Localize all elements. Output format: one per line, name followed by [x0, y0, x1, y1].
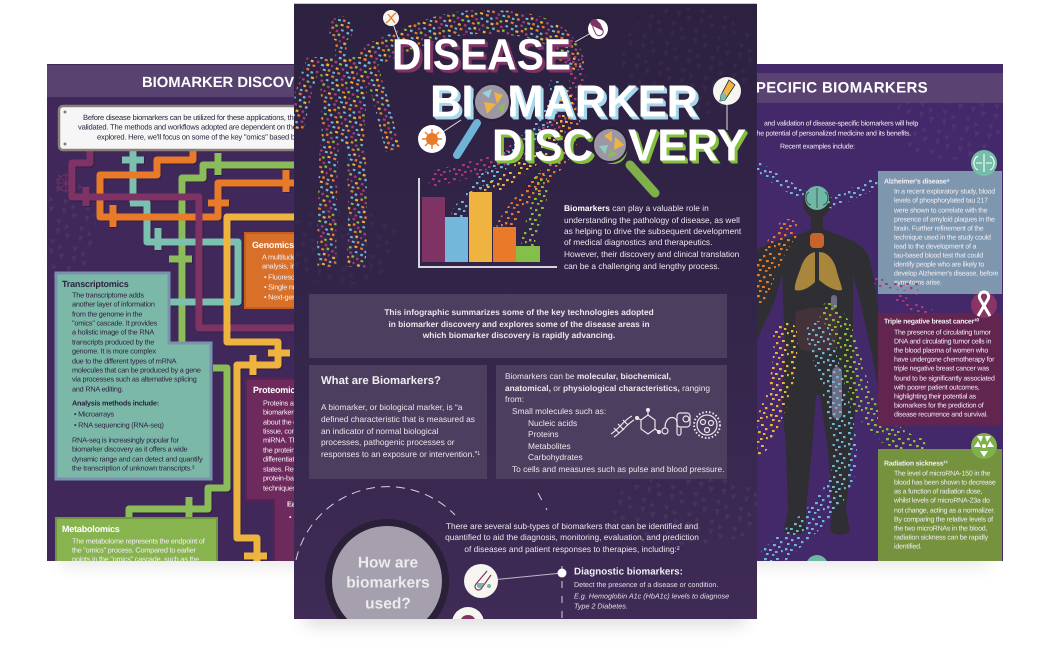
particle human figure — [296, 16, 393, 267]
panel: biomarker characteristics: Biomarkers can be molecular, biochemical, — [505, 371, 671, 381]
panel: transcriptomics: the transcription of unknown transcripts.³ — [72, 464, 195, 472]
diagnostic biomarkers text: Diagnostic biomarkers: — [574, 566, 683, 578]
panel: triple negative breast cancer: highlighting their potential as — [894, 392, 977, 400]
panel: metabolomics: the "omics" process. Compared to earlier — [72, 546, 197, 554]
summary box — [309, 294, 727, 358]
icon: virus callout — [418, 120, 461, 153]
human silhouette with organs — [757, 187, 887, 534]
panel: genomics: • Next-generation — [264, 292, 317, 302]
pipes network — [72, 150, 297, 565]
intro note: Before disease biomarkers can be utilized for these applications, they — [83, 113, 301, 122]
header band: DISEASE-SPECIFIC BIOMARKERS — [672, 80, 928, 96]
panel: Alzheimer's disease: levels of phosphorylated tau 217 — [894, 196, 988, 204]
bars — [422, 192, 540, 262]
summary box: This infographic summarizes some of the key technologies adopted — [384, 307, 654, 317]
panel: what are biomarkers — [309, 365, 487, 479]
panel: radiation sickness: blood has been shown to decrease — [894, 478, 996, 486]
panel: transcriptomics — [56, 273, 211, 479]
panel: proteomics: miRNA. The — [263, 436, 301, 444]
icon: brain on figure — [805, 186, 829, 210]
intro note — [59, 106, 323, 150]
panel: radiation sickness: whilst levels of microRNA-23a do — [893, 496, 990, 504]
icons: DNA, molecule, stethoscope, cell — [611, 408, 720, 438]
how are biomarkers used circle: How are — [358, 554, 419, 572]
panel: biomarker characteristics: Small molecules such as: — [512, 406, 606, 416]
intro paragraph: Biomarkers can play a valuable role in — [564, 203, 709, 213]
title line: DISCOVERY: VERY — [628, 120, 746, 170]
panel: transcriptomics: The transcriptome adds — [72, 290, 144, 300]
panel: proteomics: about the cell — [263, 418, 304, 426]
panel: metabolomics: points in the "omics" cascade, such as the — [72, 554, 199, 564]
panel: proteomics: states. Research — [263, 464, 314, 474]
panel: metabolomics: The metabolome represents the endpoint of — [72, 536, 206, 546]
summary box: in biomarker discovery and explores some of the disease areas in — [388, 319, 650, 329]
panel: transcriptomics: • Microarrays — [74, 410, 114, 418]
intro paragraph: as helping to drive the subsequent development — [564, 226, 742, 236]
icon: test tube callout — [713, 77, 741, 130]
panel: triple negative breast cancer: DNA and circulating tumor cells in — [894, 338, 992, 346]
header band — [757, 73, 1003, 103]
panel: triple negative breast cancer: with poorer patient outcomes, — [893, 384, 980, 392]
panel: triple negative breast cancer — [878, 313, 1002, 426]
header band — [47, 65, 294, 97]
panel: metabolomics: Metabolomics — [62, 524, 120, 534]
icon: brain badge — [971, 150, 997, 176]
icon: partial teal badge — [807, 555, 827, 561]
panel: proteomics: differentiating — [263, 454, 304, 464]
panel: proteomics: protein-based — [263, 474, 305, 482]
panel: proteomics: • — [289, 512, 292, 522]
overlapping particles — [878, 282, 918, 447]
how are biomarkers used circle: biomarkers — [346, 574, 430, 592]
intro paragraph: can be a challenging and lengthy process. — [564, 261, 720, 271]
subtypes intro — [445, 521, 699, 554]
panel: radiation sickness: identified. — [894, 542, 922, 550]
icon: ribbon badge — [971, 292, 997, 318]
summary box: which biomarker discovery is rapidly advancing. — [422, 330, 615, 340]
subtypes intro: of diseases and patient responses to therapies, including:² — [464, 544, 680, 554]
title line: DISCOVERY: DISC — [492, 120, 593, 170]
panel: what are biomarkers: processes, pathogenic processes or — [321, 437, 455, 447]
icon: pill node — [452, 607, 484, 639]
panel: proteomics: Ea — [287, 500, 297, 508]
panel: proteomics: biomarkers — [263, 408, 297, 416]
icon: magnifier over BIOMARKER — [457, 84, 510, 155]
panel: radiation sickness: the two microRNAs in the blood, — [894, 524, 987, 532]
panel: transcriptomics: biomarker discovery as it offers a wide — [72, 444, 188, 454]
panel: Alzheimer's disease: identify people who are likely to — [894, 260, 984, 268]
title line: DISCOVERY — [494, 129, 748, 164]
intro paragraph — [564, 203, 742, 271]
intro text: and validation of disease-specific biomarkers will help — [764, 120, 918, 128]
intestines — [795, 308, 839, 352]
diagnostic biomarkers text — [574, 566, 729, 610]
panel: biomarker characteristics: Metabolites — [528, 441, 571, 451]
panel: proteomics: the proteins — [263, 446, 299, 454]
trachea — [810, 233, 824, 248]
panel: radiation sickness — [878, 449, 1002, 562]
panel: genomics: • Single nucleotide — [264, 282, 320, 292]
panel: transcriptomics: Analysis methods include: — [72, 398, 159, 408]
panel: radiation sickness: not change, acting as a normalizer. — [894, 506, 995, 514]
bar chart — [419, 178, 557, 267]
diagnostic biomarkers text: Type 2 Diabetes. — [574, 602, 628, 610]
intro text: Recent examples include: — [780, 142, 855, 150]
diagnostic biomarkers text: Detect the presence of a disease or condition. — [574, 581, 718, 589]
header band: BIOMARKER DISCOVERY — [142, 75, 324, 91]
icon: test tube node — [464, 564, 498, 598]
intro paragraph: understanding the pathology of disease, as well — [564, 215, 740, 225]
panel: Alzheimer's disease: develop Alzheimer's disease, before — [894, 270, 998, 278]
particle streams — [757, 167, 932, 557]
panel: disease-specific biomarkers — [757, 64, 1003, 561]
panel: transcriptomics: another layer of information — [72, 300, 155, 308]
panel: genomics: A multitude — [262, 252, 296, 262]
panel: Alzheimer's disease: were shown to correlate with the — [893, 206, 988, 214]
panel: triple negative breast cancer: Triple negative breast cancer¹⁰ — [884, 318, 979, 326]
panel: metabolomics — [55, 517, 218, 561]
panel: transcriptomics: "omics" cascade. It provides — [72, 318, 158, 328]
panel: Alzheimer's disease: brain. Further refinement of the — [894, 224, 984, 232]
panel: Alzheimer's disease: Alzheimer's disease⁹ — [884, 178, 950, 186]
panel: genomics — [244, 232, 294, 309]
panel: triple negative breast cancer: found to be significantly associated — [894, 374, 995, 382]
dashed orbits — [296, 487, 562, 620]
title line: DISEASE: DISEASE — [392, 30, 571, 80]
icon: pill callout — [575, 19, 608, 42]
panel: radiation sickness: radiation sickness can be rapidly — [894, 534, 989, 542]
panel: radiation sickness: Radiation sickness¹¹ — [884, 460, 949, 468]
intro paragraph: However, their discovery and clinical translation — [564, 249, 740, 259]
panel: Alzheimer's disease: tau-based blood test that could — [894, 252, 983, 260]
panel: transcriptomics: Transcriptomics — [62, 279, 129, 289]
intro note: validated. The methods and workflows adopted are dependent on the type — [78, 122, 312, 132]
panel: Alzheimer's disease: In a recent exploratory study, blood — [894, 188, 995, 196]
diagnostic biomarkers text: E.g. Hemoglobin A1c (HbA1c) levels to diagnose — [574, 592, 729, 600]
panel: triple negative breast cancer: triple negative breast cancer was — [894, 364, 990, 372]
panel: biomarker discovery methods — [47, 64, 294, 561]
icon: faint molecule — [56, 173, 76, 193]
panel: transcriptomics: RNA-seq is increasingly popular for — [72, 436, 179, 444]
panel: biomarker characteristics: anatomical, or physiological characteristics, ranging — [505, 383, 710, 393]
panel: Alzheimer's disease: symptoms arise. — [894, 278, 942, 286]
panel: what are biomarkers: an indicator of normal biological — [321, 426, 438, 436]
panel: triple negative breast cancer: have undergone chemotherapy for — [894, 356, 995, 364]
panel: transcriptomics: and RNA editing. — [72, 384, 123, 394]
intro text — [755, 120, 918, 150]
panel: triple negative breast cancer: biomarkers for the prediction of — [894, 402, 984, 410]
panel: transcriptomics: transcripts produced by the — [72, 338, 154, 346]
panel: transcriptomics: from the genome in the — [72, 310, 142, 318]
panel: Alzheimer's disease: lead to the development of a — [894, 242, 977, 250]
subtypes intro: quantified to aid the diagnosis, monitoring, evaluation, and prediction — [445, 532, 699, 542]
panel: transcriptomics: a holistic image of the RNA — [72, 328, 154, 336]
panel: biomarker characteristics: To cells and measures such as pulse and blood pressure. — [512, 464, 724, 474]
panel: genomics: • Fluorescence — [264, 272, 309, 282]
panel: biomarker characteristics: Nucleic acids — [528, 418, 577, 428]
panel: what are biomarkers: responses to an exposure or intervention.”¹ — [321, 449, 480, 459]
intro paragraph: of medical diagnostics and therapeutics. — [564, 237, 712, 247]
particle streams to chart — [372, 22, 577, 244]
panel: what are biomarkers: A biomarker, or biological marker, is “a — [321, 402, 463, 412]
lungs — [795, 252, 842, 291]
panel: genomics: Genomics — [252, 240, 294, 250]
panel: triple negative breast cancer: disease recurrence and survival. — [894, 410, 988, 418]
panel: proteomics — [245, 378, 294, 561]
panel: biomarker characteristics: from: — [505, 394, 524, 404]
intro text: the potential of personalized medicine and its benefits. — [755, 130, 911, 138]
panel: what are biomarkers: What are Biomarkers? — [321, 375, 441, 387]
panel: radiation sickness: By comparing the relative levels of — [894, 516, 993, 524]
connector to diagnostic — [481, 573, 562, 581]
panel: what are biomarkers: defined characteristic that is measured as — [321, 414, 475, 424]
intro note: explored. Here, we'll focus on some of the key "omics" based biomarker — [97, 132, 323, 142]
panel: Alzheimer's disease — [878, 171, 1002, 294]
panel: triple negative breast cancer: The presence of circulating tumor — [894, 328, 992, 336]
how are biomarkers used circle: used? — [365, 596, 411, 612]
panel: genomics: analysis, including — [262, 262, 317, 270]
panel: transcriptomics: due to the different types of mRNA — [72, 356, 177, 366]
panel: transcriptomics: genome. It is more complex — [72, 346, 156, 356]
panel: biomarker characteristics — [496, 365, 727, 479]
panel: transcriptomics: via processes such as alternative splicing — [72, 374, 197, 384]
panel: Alzheimer's disease: presence of amyloid plaques in the — [894, 216, 995, 224]
panel: main disease biomarker discovery — [280, 3, 770, 643]
panel: radiation sickness: The level of microRNA-150 in the — [894, 470, 990, 478]
subtypes intro: There are several sub-types of biomarkers that can be identified and — [446, 521, 699, 531]
panel: proteomics: techniques — [263, 484, 297, 492]
panel: transcriptomics: molecules that can be produced by a gene — [72, 366, 201, 374]
panel: transcriptomics: dynamic range and can detect and quantify — [72, 454, 203, 464]
title line: DISCOVERY: O — [594, 120, 626, 170]
panel: biomarker characteristics: Proteins — [528, 429, 559, 439]
panel: proteomics: tissue, compared — [263, 426, 315, 436]
icon: DNA callout — [383, 10, 399, 38]
panel: radiation sickness: as a function of radiation dose, — [894, 488, 983, 496]
icon: radiation badge — [971, 433, 997, 459]
bone — [832, 367, 842, 419]
panel: transcriptomics: • RNA sequencing (RNA-seq) — [74, 420, 164, 430]
panel: Alzheimer's disease: technique used in the study could — [894, 234, 991, 242]
how are biomarkers used circle — [325, 519, 449, 643]
panel: biomarker characteristics: Carbohydrates — [528, 452, 583, 462]
panel: proteomics: Proteomics — [253, 385, 300, 395]
title — [394, 38, 748, 164]
panel: triple negative breast cancer: the blood plasma of women who — [894, 346, 988, 354]
node dot — [558, 568, 566, 578]
title line: BIOMARKER: BIOMARKER — [430, 76, 698, 126]
panel: proteomics: Proteins are — [263, 398, 300, 408]
icon: magnifier over DISCOVERY — [593, 128, 655, 193]
